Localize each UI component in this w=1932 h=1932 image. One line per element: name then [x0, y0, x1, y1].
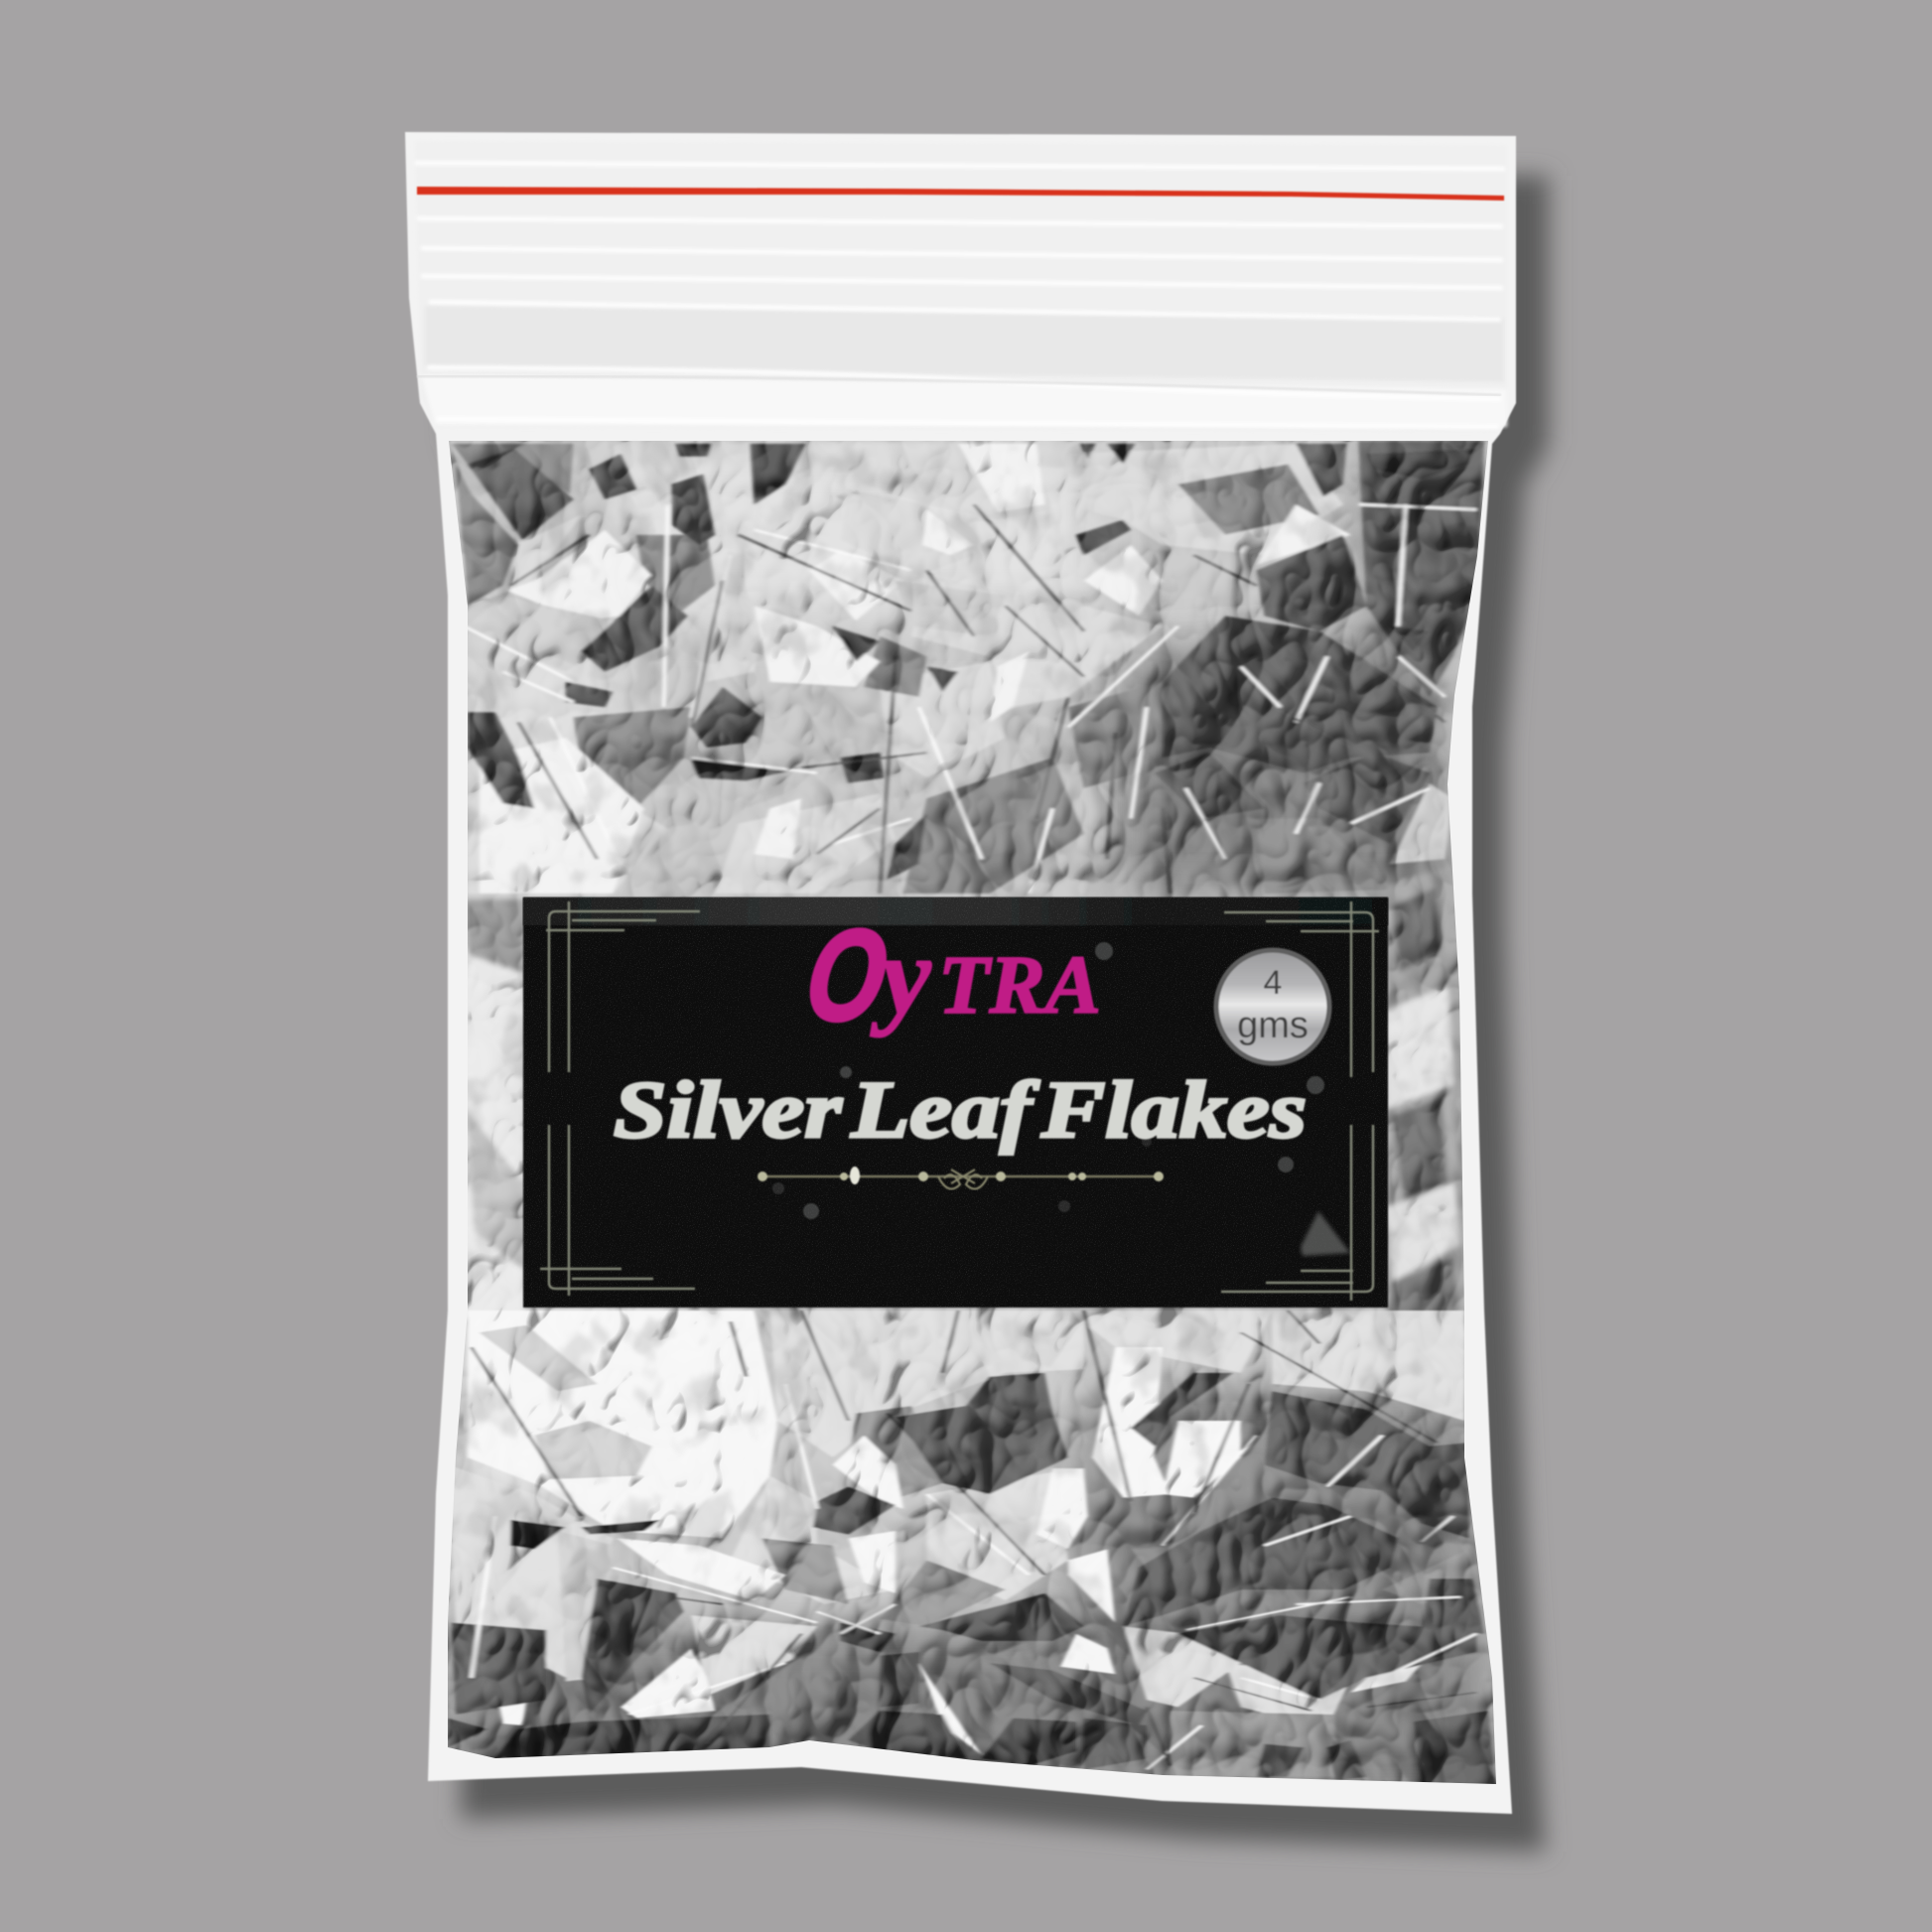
decorative divider ornament [758, 1167, 1164, 1189]
label reflection [1301, 1211, 1350, 1256]
foil facets: lower section [448, 1311, 1496, 1788]
weight badge: 4 gms [1216, 950, 1329, 1063]
label background [523, 897, 1388, 1308]
red seal line [417, 187, 1504, 201]
top zip closure [415, 141, 1507, 431]
foil facets: upper section [452, 441, 1484, 894]
bag body [405, 132, 1516, 1814]
foil facets: middle side strips [462, 863, 1466, 1330]
product label [523, 897, 1388, 1308]
label bubbles [772, 942, 1324, 1219]
brand logo: Oytra: TRA [938, 939, 1101, 1032]
bag drop shadow [442, 172, 1549, 1852]
brand logo: Oytra: y [870, 914, 932, 1037]
brand logo: Oytra [798, 903, 1101, 1047]
brand logo: Oytra: O [798, 903, 895, 1047]
product image: silver leaf flakes bag [404, 131, 1563, 1864]
label ornate frame [540, 901, 1379, 1301]
foil dark crease blotches [437, 437, 1509, 1797]
foil low-frequency tone map [447, 447, 1499, 1797]
product title: Silver Leaf Flakes [614, 1064, 1307, 1155]
weight badge: 4 gms: 4 [1264, 964, 1282, 1002]
foil crinkle texture [437, 437, 1509, 1797]
crumpled silver foil contents [437, 437, 1509, 1797]
weight badge: 4 gms: gms [1237, 1005, 1309, 1046]
label top sheen [523, 897, 1388, 925]
